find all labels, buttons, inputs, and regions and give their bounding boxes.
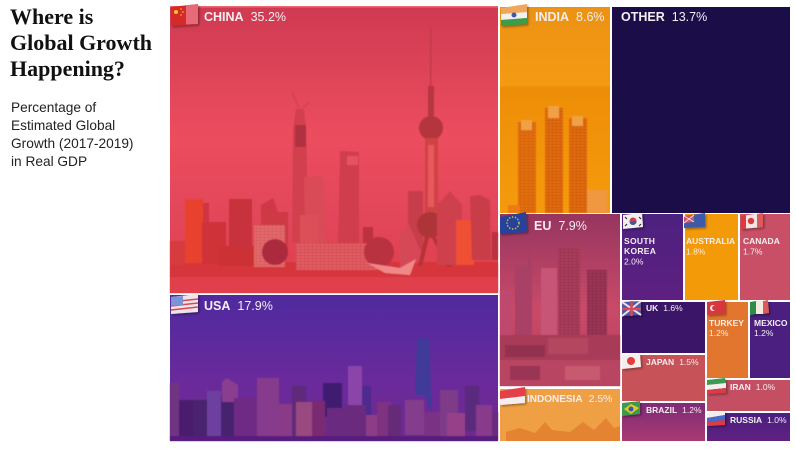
label: EU: EU 7.9% — [534, 219, 587, 233]
label: Canada: 1.7% — [743, 246, 763, 256]
flag: Indonesia — [500, 387, 525, 405]
flag: Iran — [707, 378, 726, 394]
skyline: New York — [170, 338, 498, 441]
panel: Brazil — [622, 401, 705, 441]
panel: China — [170, 4, 498, 293]
flag: UK — [622, 301, 641, 316]
flag: Australia — [684, 213, 705, 228]
label: Mexico: MEXICO — [754, 318, 788, 328]
label: Turkey: TURKEY — [709, 318, 744, 328]
flag: India — [501, 4, 527, 26]
label: Japan: JAPAN 1.5% — [646, 357, 699, 367]
skyline: India towers — [508, 106, 607, 213]
panel: Turkey — [707, 300, 748, 378]
label: Other: OTHER 13.7% — [621, 10, 707, 24]
title: Global Growth — [10, 30, 152, 55]
flag: Mexico — [750, 300, 769, 315]
subtitle text: Percentage of — [11, 100, 96, 115]
subtitle text — [11, 100, 134, 169]
panel: Russia — [707, 411, 790, 441]
panel: South Korea — [622, 213, 683, 300]
flag: Canada — [741, 213, 763, 229]
panel: Japan — [622, 354, 705, 401]
panel: India — [500, 4, 610, 213]
panel: Canada — [740, 213, 790, 300]
panel: EU — [500, 212, 620, 386]
title: Where is — [10, 4, 94, 29]
panel: Mexico — [750, 300, 790, 378]
flag: USA — [171, 294, 198, 314]
label: UK: UK 1.6% — [646, 303, 683, 313]
panel: UK — [622, 301, 705, 353]
label: Russia: RUSSIA 1.0% — [730, 415, 787, 425]
panel: USA — [170, 294, 498, 441]
panel: Iran — [707, 378, 790, 411]
skyline: Frankfurt — [500, 245, 620, 386]
label: India: INDIA 8.6% — [535, 10, 605, 24]
label: South Korea: 2.0% — [624, 256, 644, 266]
subtitle text: Estimated Global — [11, 118, 115, 133]
flag: China — [171, 4, 198, 26]
title — [10, 4, 152, 81]
label: Brazil: BRAZIL 1.2% — [646, 405, 702, 415]
label: Canada: CANADA — [743, 236, 780, 246]
skyline: Shanghai — [170, 27, 498, 293]
label: Iran: IRAN 1.0% — [730, 382, 776, 392]
panel: Other — [612, 7, 790, 213]
flag: Turkey — [707, 300, 725, 315]
label: Australia: AUSTRALIA — [686, 236, 735, 246]
label: Australia: 1.8% — [686, 246, 706, 256]
panel: Australia — [684, 213, 738, 300]
label: South Korea: SOUTH — [624, 236, 655, 246]
label: China: CHINA 35.2% — [204, 10, 286, 24]
subtitle text: Growth (2017-2019) — [11, 136, 134, 151]
flag: EU — [500, 212, 527, 234]
label: USA: USA 17.9% — [204, 299, 273, 313]
label: Mexico: 1.2% — [754, 328, 774, 338]
subtitle text: in Real GDP — [11, 154, 87, 169]
flag: South Korea — [623, 213, 643, 229]
flag: Japan — [622, 354, 641, 369]
title: Happening? — [10, 56, 125, 81]
flag: Brazil — [622, 401, 640, 416]
panel: Indonesia — [500, 387, 620, 441]
label: Indonesia: INDONESIA 2.5% — [527, 393, 612, 405]
label: South Korea: KOREA — [624, 246, 656, 256]
label: Turkey: 1.2% — [709, 328, 729, 338]
flag: Russia — [707, 411, 725, 426]
skyline: Jakarta — [506, 418, 620, 441]
